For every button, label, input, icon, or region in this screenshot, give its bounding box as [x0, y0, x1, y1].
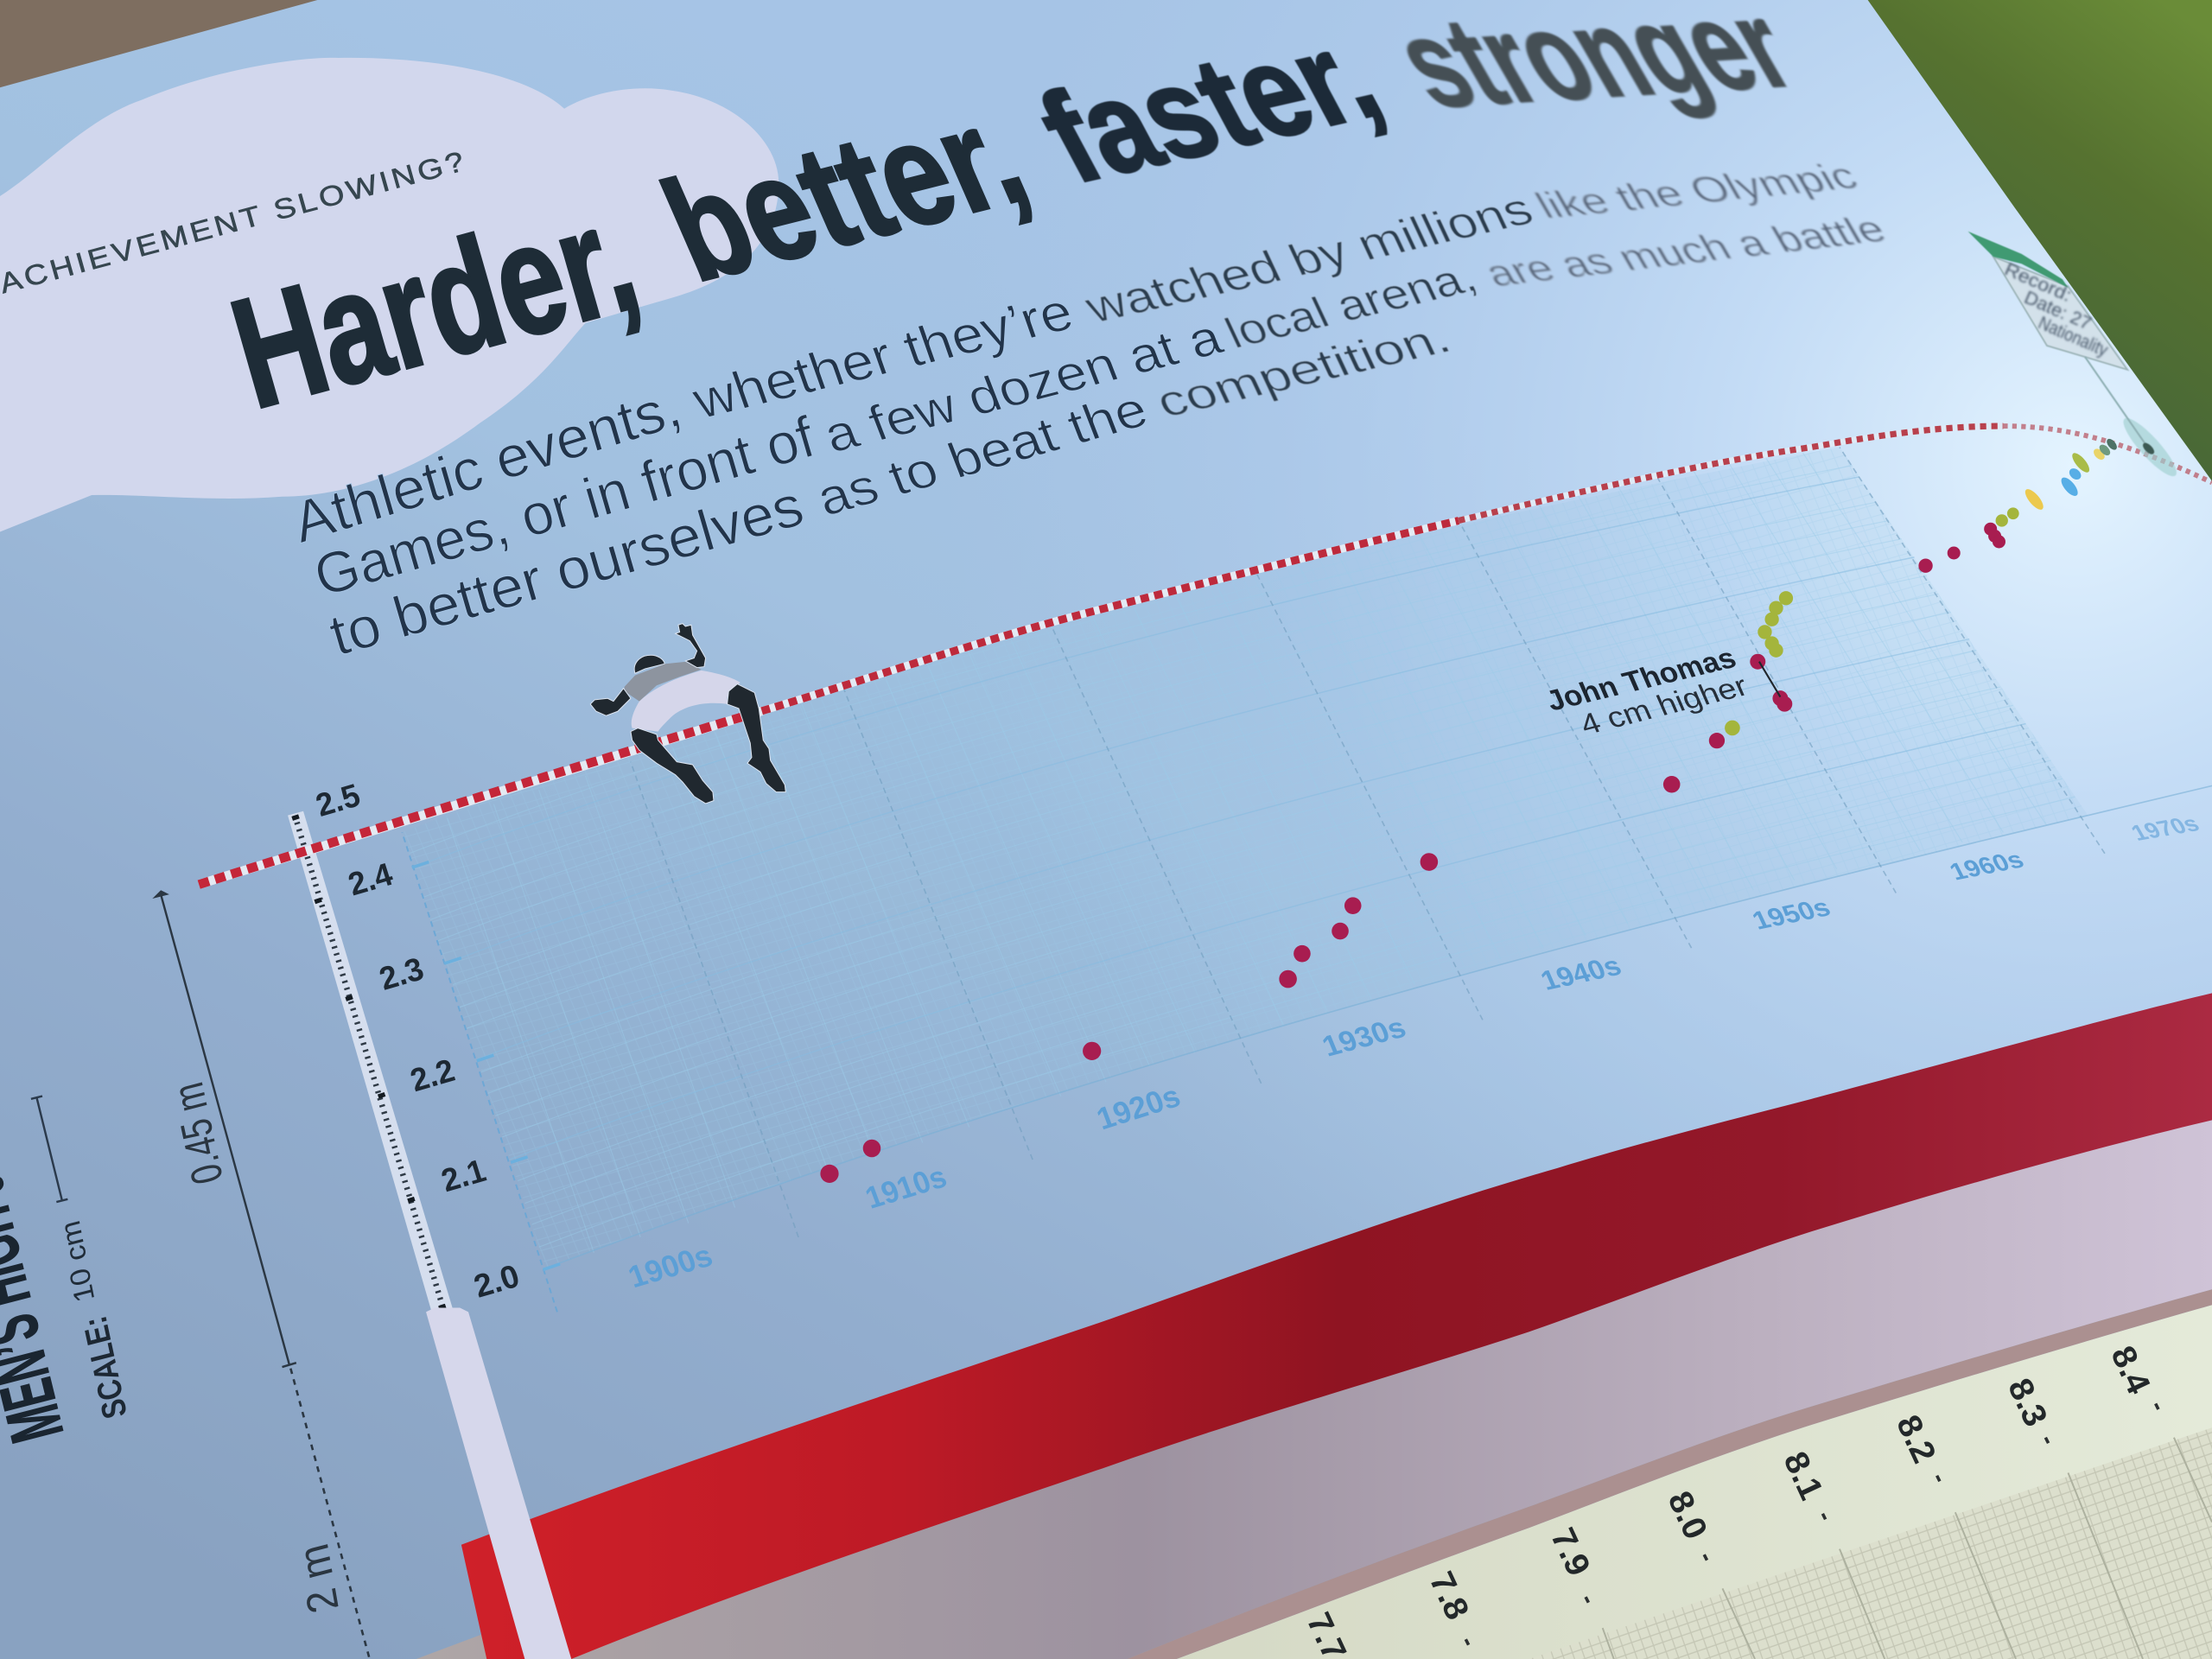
- decade labels: [624, 811, 2203, 1294]
- intro paragraph: Athletic events,: [286, 374, 688, 556]
- red band: [461, 993, 2212, 1659]
- decade labels: 1940s: [1535, 950, 1626, 996]
- callout: John Thomas: John Thomas: [1541, 642, 1741, 717]
- intro paragraph: like the Olympic: [1528, 156, 1866, 227]
- upright pole ruler: [288, 811, 453, 1312]
- decade labels: 1930s: [1318, 1012, 1411, 1063]
- intro paragraph: whether they’re: [684, 283, 1080, 430]
- lower panel: long jump chart: 8.4: [2103, 1340, 2158, 1400]
- lower panel: long jump chart: 7.8: [1422, 1567, 1476, 1625]
- height arrow 0.45 m: 0.45 m: [163, 1077, 232, 1189]
- y axis labels: 2.3: [375, 950, 428, 997]
- chart grid: [402, 448, 2212, 1312]
- lower panel: long jump chart: [1127, 1289, 2212, 1659]
- title: Harder,: [215, 168, 654, 442]
- lower panel: long jump chart: 8.3: [2000, 1373, 2054, 1432]
- y axis labels: 2.1: [437, 1152, 490, 1198]
- intro paragraph: [286, 156, 1894, 669]
- y axis labels: [311, 777, 524, 1305]
- lower panel: long jump chart: 8.1: [1777, 1446, 1830, 1505]
- intro paragraph: competition.: [1148, 315, 1459, 427]
- grey band: [416, 1072, 2212, 1659]
- pole lower section: [426, 1307, 571, 1659]
- 2 m dotted height line: 2 m: [289, 1539, 348, 1618]
- decade labels: 1920s: [1092, 1077, 1185, 1136]
- intro paragraph: watched by millions: [1077, 184, 1541, 333]
- y axis labels: 2.5: [311, 777, 365, 823]
- scale bar: 10 cm: [54, 1217, 100, 1306]
- callout: John Thomas: 4 cm higher: [1575, 670, 1752, 741]
- decade labels: 1910s: [861, 1159, 951, 1216]
- table surface top left: [0, 0, 317, 87]
- intro paragraph: Games, or in front of: [307, 404, 822, 609]
- green surface right: [1868, 0, 2212, 481]
- decade labels: 1900s: [624, 1237, 717, 1294]
- kicker: ACHIEVEMENT SLOWING?: [0, 144, 471, 299]
- 2 m dotted height line: [289, 1369, 370, 1659]
- intro paragraph: a few dozen at a: [817, 309, 1230, 463]
- intro paragraph: are as much a battle: [1478, 208, 1894, 295]
- y axis labels: 2.0: [469, 1257, 524, 1305]
- icon: jumping athlete: [590, 624, 785, 804]
- world record callout: Nationality: [2036, 312, 2112, 360]
- height arrow 0.45 m: [152, 890, 296, 1367]
- y axis labels: 2.2: [406, 1052, 459, 1098]
- world record callout: Record:: [2001, 258, 2075, 306]
- intro paragraph: as to beat the: [809, 381, 1155, 527]
- title: better,: [641, 72, 1047, 311]
- high jump bar: [199, 426, 2212, 885]
- world record callout: Date: 27: [2021, 287, 2094, 334]
- intro paragraph: to better ourselves: [322, 473, 810, 669]
- scale bar: [31, 1096, 135, 1422]
- lower panel: long jump chart: 8.2: [1889, 1409, 1942, 1469]
- record data points: [820, 437, 2119, 1183]
- decade labels: 1970s: [2126, 811, 2203, 845]
- title: [215, 0, 1817, 442]
- y axis labels: 2.4: [344, 855, 397, 902]
- world record callout: [1968, 232, 2183, 482]
- scale bar: SCALE:: [76, 1313, 135, 1422]
- lower panel: long jump chart: 7.9: [1543, 1522, 1597, 1581]
- lower panel: long jump chart: 8.0: [1661, 1486, 1714, 1545]
- decade labels: 1960s: [1945, 846, 2029, 886]
- intro paragraph: local arena,: [1217, 253, 1484, 358]
- decade labels: 1950s: [1747, 893, 1835, 935]
- cloud shape: [0, 58, 779, 532]
